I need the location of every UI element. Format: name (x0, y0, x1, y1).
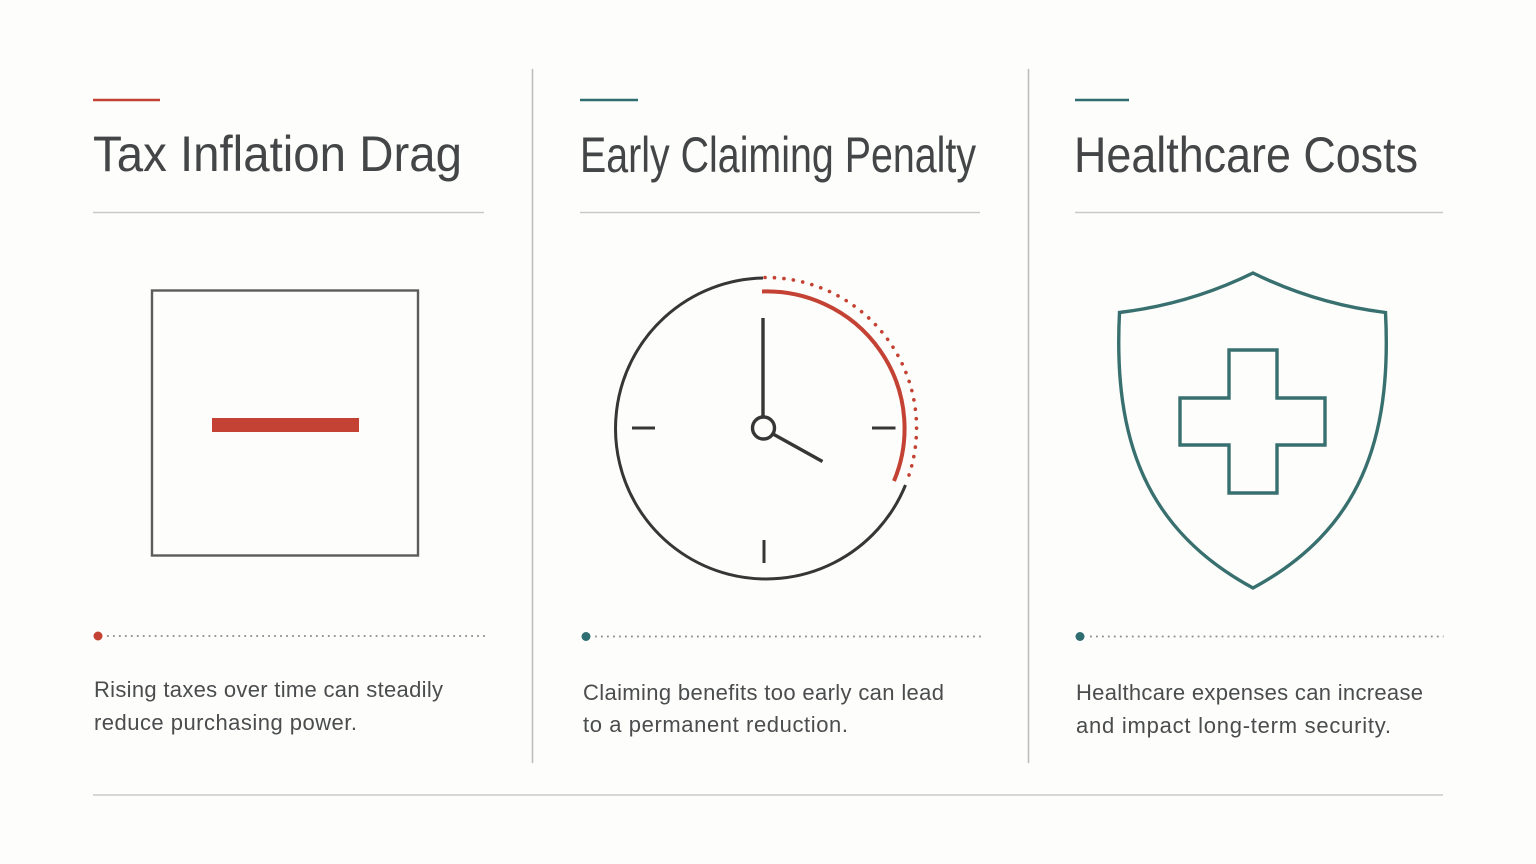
icon: minus in square (152, 290, 418, 556)
icon: clock with red arc (616, 277, 917, 579)
panel: healthcare costs (1074, 100, 1444, 738)
heading: Healthcare Costs: Healthcare Costs (1074, 127, 1418, 183)
panel: early claiming penalty (580, 100, 981, 737)
text block: healthcare description: Healthcare expenses can increase (1076, 680, 1423, 705)
icon: shield with cross (1119, 273, 1386, 588)
dotted separator: claiming (582, 632, 981, 641)
dotted separator: healthcare (1076, 632, 1444, 641)
heading: Early Claiming Penalty: Early Claiming Penalty (580, 127, 976, 183)
text block: claiming description: to a permanent reduction. (583, 712, 848, 737)
text block: tax description: Rising taxes over time can steadily (94, 677, 443, 702)
heading: Tax Inflation Drag: Tax Inflation Drag (93, 126, 462, 182)
text block: tax description: reduce purchasing power. (94, 710, 357, 735)
dotted separator: tax (94, 632, 485, 640)
panel: tax inflation drag (93, 100, 485, 735)
text block: healthcare description: and impact long-term security. (1076, 713, 1391, 738)
text block: claiming description: Claiming benefits too early can lead (583, 680, 944, 705)
